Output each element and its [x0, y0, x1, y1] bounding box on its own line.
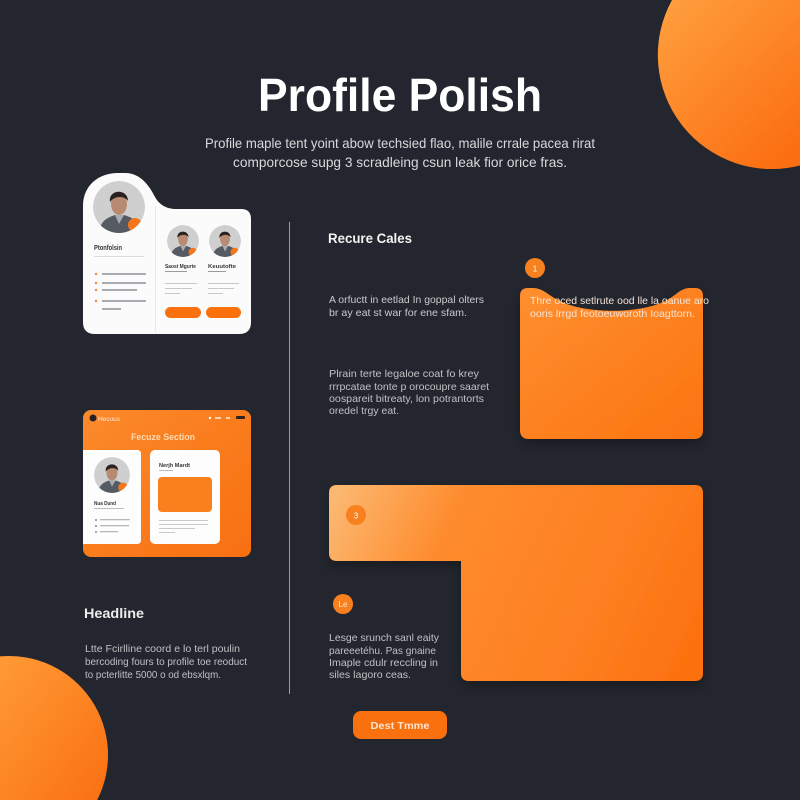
right column text: Keuutofte	[208, 264, 236, 270]
left column text: Saost Mgurte	[165, 264, 196, 270]
card divider	[155, 206, 156, 332]
text block: headline description: to pcterlitte 5000 o od ebsxlqm.	[85, 669, 221, 681]
text block: large card description: Imaple cdulr reccling in	[329, 657, 438, 669]
subtitle: comporcose supg 3 scradleing csun leak fior orice fras.	[233, 154, 567, 170]
text block: short description: br ay eat st war for ene sfam.	[329, 307, 467, 319]
title: Profile Polish	[258, 69, 542, 121]
text block: headline description	[85, 643, 247, 681]
panel: feature section card	[83, 410, 251, 557]
notched card text: Thre oced setlrute ood lle la oanue aro	[530, 295, 709, 307]
text block: headline description: bercoding fours to profile toe reoduct	[85, 656, 247, 668]
left white card: Nua Dund	[94, 501, 116, 507]
decorative circle: top right	[658, 0, 800, 169]
text block: long description: oospareit bitreaty, lon potrantorts	[329, 393, 484, 405]
logo	[90, 414, 96, 422]
panel: large stepped orange card	[329, 485, 703, 681]
number badge 1	[525, 258, 545, 278]
heading: headline: Headline	[84, 605, 144, 621]
right white card	[150, 450, 220, 544]
panel: profile card	[83, 173, 251, 334]
panel: notched orange card	[520, 288, 703, 439]
button: call to action	[353, 711, 447, 739]
number badge Le	[333, 594, 353, 614]
subtitle: Profile maple tent yoint abow techsied flao, malile crrale pacea rirat	[205, 135, 595, 151]
small avatar left	[167, 225, 199, 257]
text block: long description: oredel trgy eat.	[329, 405, 399, 417]
text block: headline description: Ltte Fcirlline coord e lo terl poulin	[85, 643, 240, 655]
brand label: Hecuus	[98, 416, 121, 423]
left column text	[165, 264, 197, 294]
text block: long description	[329, 368, 489, 417]
right column text	[208, 264, 239, 294]
button left	[165, 307, 201, 318]
text block: large card description: siles lagoro ceas.	[329, 669, 411, 681]
small avatar right	[209, 225, 241, 257]
notched card text: ooris lrrgd feotoeuworoth Ioagttorn.	[530, 308, 695, 320]
number badge 1: 1	[533, 264, 538, 274]
section heading: Fecuze Section	[131, 432, 195, 443]
subtitle	[205, 135, 595, 170]
button: call to action: Dest Tmme	[370, 720, 430, 732]
decorative circle: bottom left	[0, 656, 108, 800]
number badge 3: 3	[354, 512, 359, 520]
text block: large card description: pareeetéhu. Pas gnaine	[329, 645, 436, 657]
number badge Le: Le	[339, 600, 348, 609]
text block: large card description: Lesge srunch sanl eaity	[329, 632, 440, 644]
text block: long description: rrrpcatae tonte p orocoupre saaret	[329, 381, 489, 393]
nav items	[209, 416, 245, 419]
number badge 3	[346, 505, 366, 525]
button right	[206, 307, 241, 318]
heading: feature cales: Recure Cales	[328, 231, 412, 246]
text block: long description: Plrain terte legaloe coat fo krey	[329, 368, 480, 380]
text block: short description: A orfuctt in eetlad In goppal olters	[329, 294, 484, 306]
text block: large card description	[329, 632, 440, 681]
main avatar	[93, 181, 145, 233]
feature list	[95, 273, 146, 310]
left white card	[83, 450, 141, 544]
faint bio lines	[94, 256, 144, 257]
name label: Ptonfolsin	[94, 245, 122, 252]
notched card text	[530, 295, 709, 320]
vertical divider	[289, 222, 290, 694]
right white card: Nerjh Mardt	[159, 463, 190, 469]
text block: short description	[329, 294, 484, 319]
